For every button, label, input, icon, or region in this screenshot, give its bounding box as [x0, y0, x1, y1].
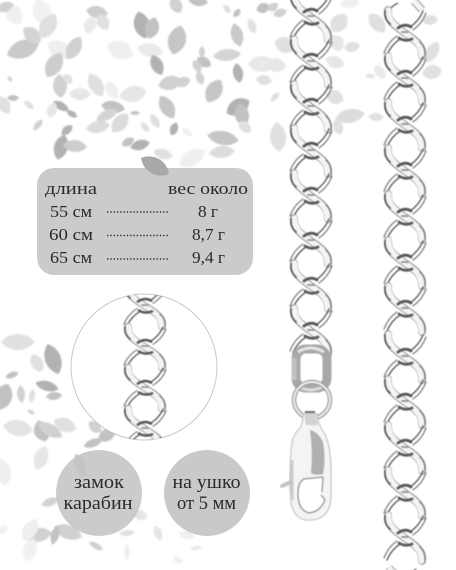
leaf over panel top — [137, 151, 173, 181]
badge: bail size — [164, 450, 250, 536]
lobster clasp with jump ring — [282, 348, 331, 520]
row 65 cm — [50, 248, 225, 267]
trigger — [282, 482, 291, 486]
row 65 cm: 65 см — [50, 248, 93, 267]
magnified chain circle — [71, 285, 217, 450]
row 55 cm: 55 см — [50, 202, 93, 221]
weight table panel — [37, 151, 253, 275]
row 60 cm — [49, 225, 225, 244]
row 55 cm — [50, 202, 218, 221]
oval connector link — [294, 348, 327, 390]
left chain — [290, 0, 332, 354]
row 65 cm: 9,4 г — [192, 248, 225, 267]
badge: bail size: на ушко — [172, 472, 240, 493]
clasp opening — [298, 477, 325, 513]
badge: clasp type: карабин — [64, 493, 132, 514]
panel background — [37, 168, 253, 275]
right chain — [384, 1, 426, 570]
jump ring — [294, 382, 330, 418]
background leaves: top scatter — [0, 0, 443, 172]
table header: weight: вес около — [168, 179, 248, 198]
table header: length: длина — [45, 179, 98, 198]
clasp body — [282, 412, 331, 520]
row 60 cm: 60 см — [49, 225, 94, 244]
background leaves: lower left scatter — [0, 334, 202, 566]
badge: clasp type: замок — [74, 472, 125, 493]
row 60 cm: 8,7 г — [192, 225, 225, 244]
badge: clasp type — [56, 450, 142, 536]
row 55 cm: 8 г — [198, 202, 218, 221]
badge: bail size: от 5 мм — [177, 493, 236, 514]
